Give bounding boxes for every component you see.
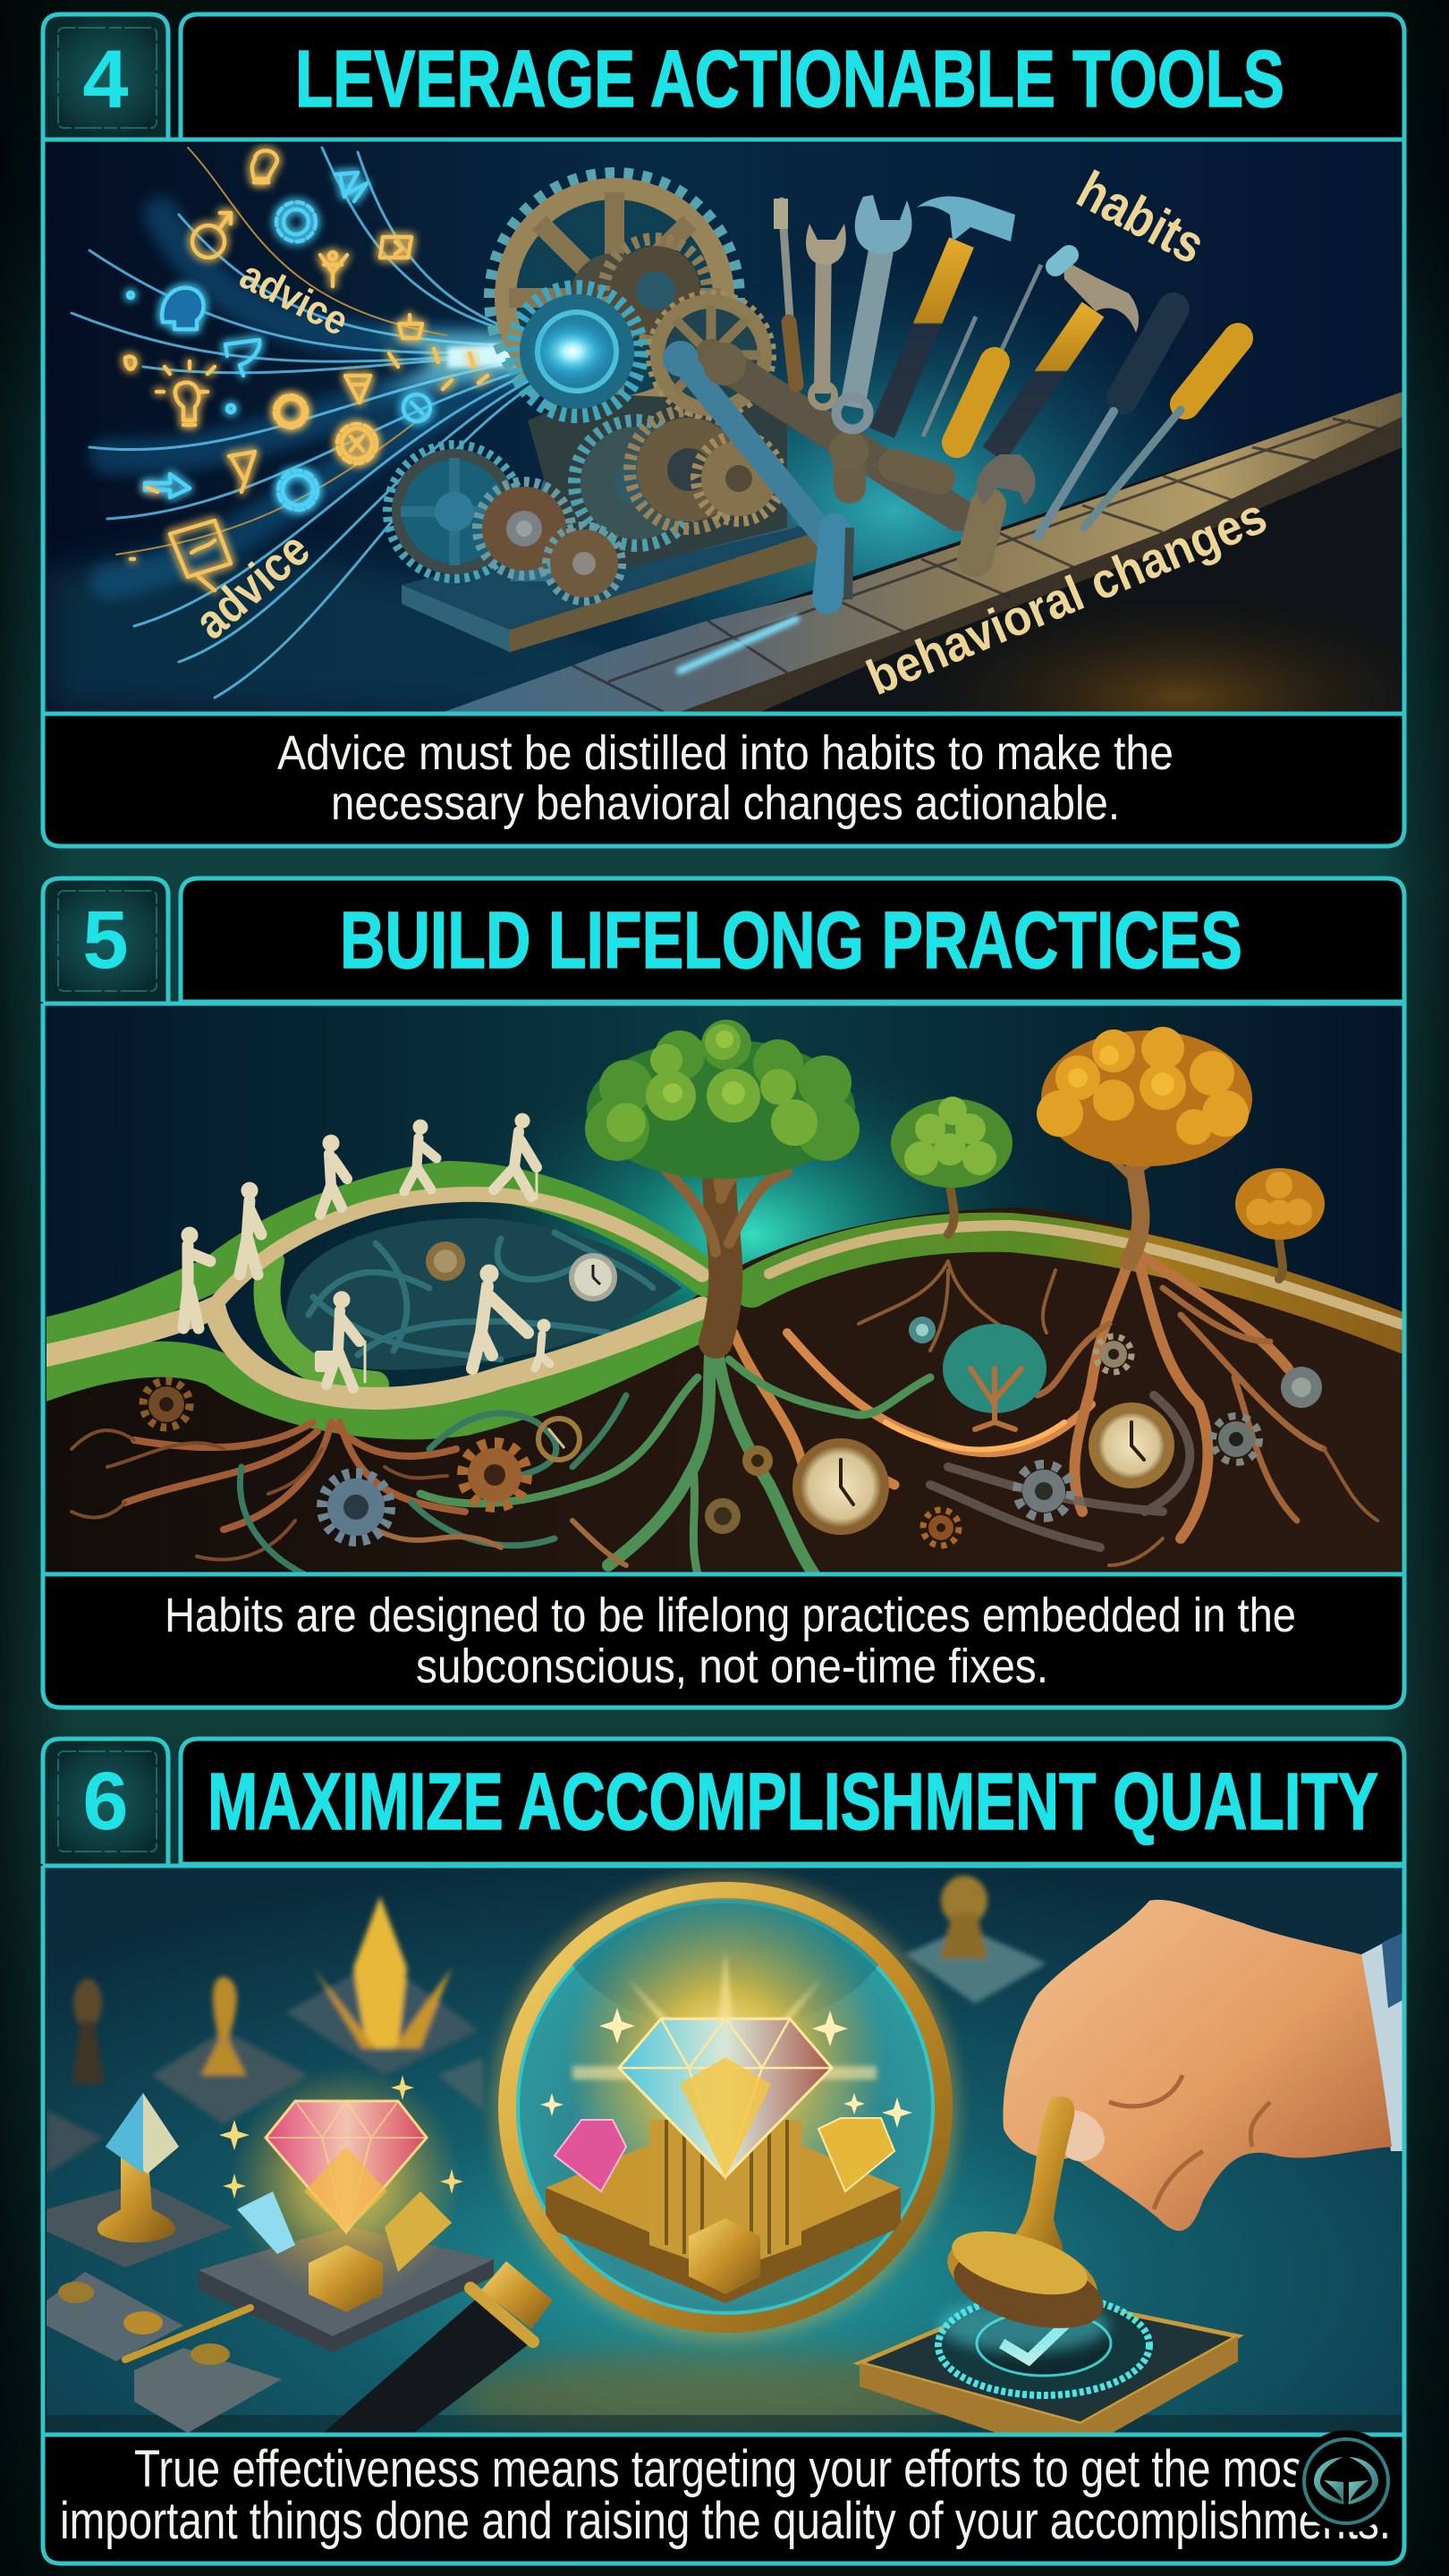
caption 4 — [43, 714, 1404, 846]
small bronze gears — [478, 482, 571, 575]
mass behind gears — [528, 394, 787, 581]
large clock — [792, 1438, 889, 1535]
small golden tree — [1235, 1168, 1325, 1240]
underground roots — [72, 1252, 1377, 1574]
advice light streams — [72, 148, 581, 698]
title 6 — [181, 1739, 1404, 1864]
panel: leverage actionable tools — [43, 14, 1449, 846]
small green tree — [891, 1097, 1013, 1188]
brick path — [444, 392, 1402, 712]
blurred background pieces — [47, 1876, 1046, 2174]
central diamond — [619, 2019, 832, 2177]
title 4 — [181, 14, 1404, 140]
caption 5: Habits are designed to be lifelong practices embedded in the — [165, 1589, 1296, 1642]
right hill — [751, 1225, 1413, 1337]
gears — [390, 176, 787, 601]
base plate of machine — [402, 479, 817, 652]
blue gear — [513, 287, 641, 416]
logo badge — [1295, 2430, 1397, 2532]
people walking — [182, 1114, 550, 1388]
magnifier handle — [313, 2261, 553, 2442]
illustration: magnifier, gems, hand with stamp — [47, 1798, 1404, 2442]
illustration: advice stream to gears, tools and brick path — [47, 143, 1402, 712]
caption 5 — [43, 1574, 1404, 1707]
platform in lens — [546, 2147, 901, 2265]
caption 6 — [43, 2435, 1404, 2563]
big gear — [493, 176, 736, 419]
small glowing tree — [943, 1324, 1046, 1429]
levers — [663, 341, 988, 599]
small pink and yellow gems — [555, 2120, 626, 2191]
label: advice lower: advice — [185, 522, 320, 649]
illustration: path over hills, trees and roots — [36, 1005, 1413, 1574]
right clock — [1089, 1402, 1174, 1488]
stamp — [938, 2097, 1112, 2352]
magnifier lens and ring — [491, 1798, 960, 2342]
lower gears — [574, 420, 699, 546]
left diamond on pedestal — [199, 2066, 494, 2352]
title 5 — [181, 878, 1404, 1002]
coin tiles — [47, 2272, 282, 2433]
golden tree — [1037, 1027, 1252, 1166]
pocket of teal roots — [286, 1218, 682, 1370]
number badge 6: 6 — [82, 1756, 129, 1847]
tree trunks and branches — [635, 1091, 1283, 1342]
glowing advice icons — [125, 150, 487, 590]
number badge 4: 4 — [82, 34, 129, 125]
bronze middle gear — [652, 296, 770, 414]
hand tools — [781, 195, 1238, 537]
panel: build lifelong practices — [36, 878, 1413, 1707]
green main tree crown — [585, 1020, 860, 1179]
sparkles left — [219, 2075, 463, 2199]
left hill ribbon — [36, 1179, 716, 1421]
rear gear bottom — [390, 447, 519, 576]
label: habits: habits — [1068, 159, 1215, 275]
pocket clocks — [426, 1241, 465, 1281]
number badge 5: 5 — [82, 894, 129, 986]
inner upper gear — [604, 239, 708, 343]
soil — [47, 1208, 1402, 1574]
number badge 6 — [43, 1739, 168, 1864]
number badge 5 — [43, 878, 168, 1002]
number badge 4 — [43, 14, 168, 140]
logo emblem — [1314, 2457, 1378, 2504]
small pawn with crystal — [47, 2093, 233, 2267]
label: advice upper: advice — [233, 251, 356, 344]
hand with stamp — [1003, 1900, 1404, 2231]
caption 4: Advice must be distilled into habits to make the — [277, 726, 1174, 780]
panel: maximize accomplishment quality — [43, 1739, 1404, 2563]
label: behavioral changes: behavioral changes — [859, 487, 1275, 706]
seal book — [860, 2292, 1238, 2435]
caption 5: subconscious, not one-time fixes. — [416, 1640, 1048, 1693]
caption 4: necessary behavioral changes actionable. — [331, 776, 1120, 830]
buried gears and clocks — [143, 1241, 1322, 1546]
